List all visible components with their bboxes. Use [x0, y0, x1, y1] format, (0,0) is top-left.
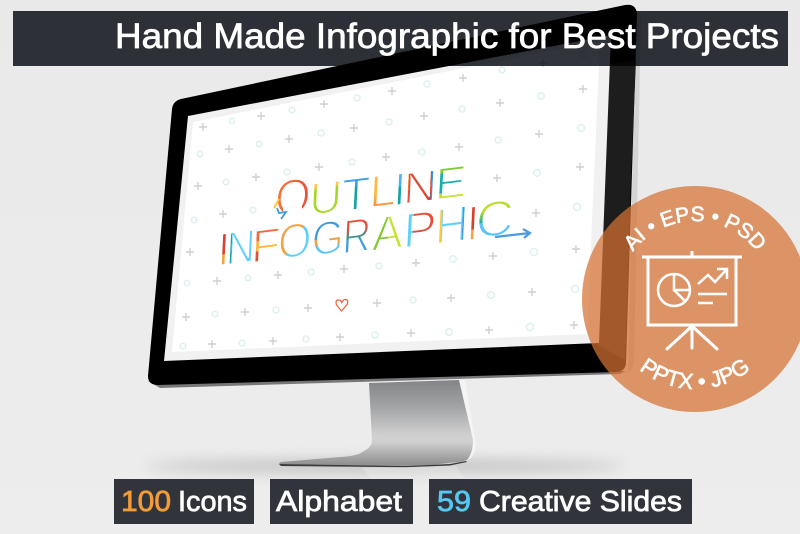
screen headline: INFOGRAPHIC: F	[250, 218, 281, 273]
icon: pie chart	[658, 274, 690, 306]
screen pattern of circles	[180, 52, 587, 349]
icon: heart	[336, 300, 348, 311]
screen headline: INFOGRAPHIC: I	[465, 196, 481, 252]
screen headline: INFOGRAPHIC: N	[225, 221, 256, 276]
label: 100 Icons: Icons	[178, 486, 247, 518]
badge circle	[582, 186, 800, 412]
screen headline: OUTLINE: N	[402, 161, 438, 214]
screen headline: INFOGRAPHIC	[216, 188, 515, 276]
monitor	[148, 5, 641, 388]
formats on top arc: AI • EPS • PSD	[626, 206, 765, 252]
label: 59 Creative Slides: 59	[437, 486, 471, 518]
screen	[172, 41, 600, 352]
monitor stand	[279, 380, 476, 480]
label: 59 Creative Slides	[429, 479, 692, 524]
screen headline: OUTLINE: L	[368, 164, 397, 217]
screen headline: INFOGRAPHIC: R	[341, 208, 372, 265]
screen headline: OUTLINE: I	[392, 162, 407, 216]
icon: presentation board	[642, 251, 742, 349]
speech tail on the O	[274, 199, 302, 219]
icon: rising line	[698, 269, 727, 284]
screen headline: INFOGRAPHIC: C	[474, 188, 515, 249]
badge: file formats	[582, 186, 800, 412]
screen headline: INFOGRAPHIC: I	[216, 222, 231, 276]
screen headline: INFOGRAPHIC: O	[277, 212, 313, 270]
label: Alphabet: Alphabet	[276, 486, 402, 518]
title: Hand Made Infographic for Best Projects	[115, 17, 779, 56]
screen frame	[164, 35, 611, 361]
screen headline: INFOGRAPHIC: P	[402, 200, 438, 259]
label: 59 Creative Slides: Creative Slides	[479, 486, 682, 518]
screen headline: INFOGRAPHIC: G	[311, 211, 345, 267]
monitor bezel	[148, 5, 641, 388]
screen headline: OUTLINE	[274, 155, 468, 228]
screen headline: OUTLINE: T	[340, 166, 371, 222]
arrow from the C	[495, 229, 530, 238]
screen headline: INFOGRAPHIC: H	[434, 195, 470, 256]
label: Alphabet	[270, 479, 413, 524]
monitor stand shadow	[145, 459, 625, 473]
label: 100 Icons: 100	[121, 486, 171, 518]
screen headline: OUTLINE: U	[308, 170, 343, 225]
screen headline: OUTLINE: O	[274, 167, 312, 228]
screen headline: INFOGRAPHIC: A	[371, 204, 405, 262]
screen pattern of plus signs	[182, 59, 587, 348]
formats on bottom arc: PPTX • JPG	[640, 358, 749, 390]
title bar	[13, 11, 788, 66]
label: 100 Icons	[114, 479, 254, 524]
screen headline: OUTLINE: E	[434, 155, 468, 210]
